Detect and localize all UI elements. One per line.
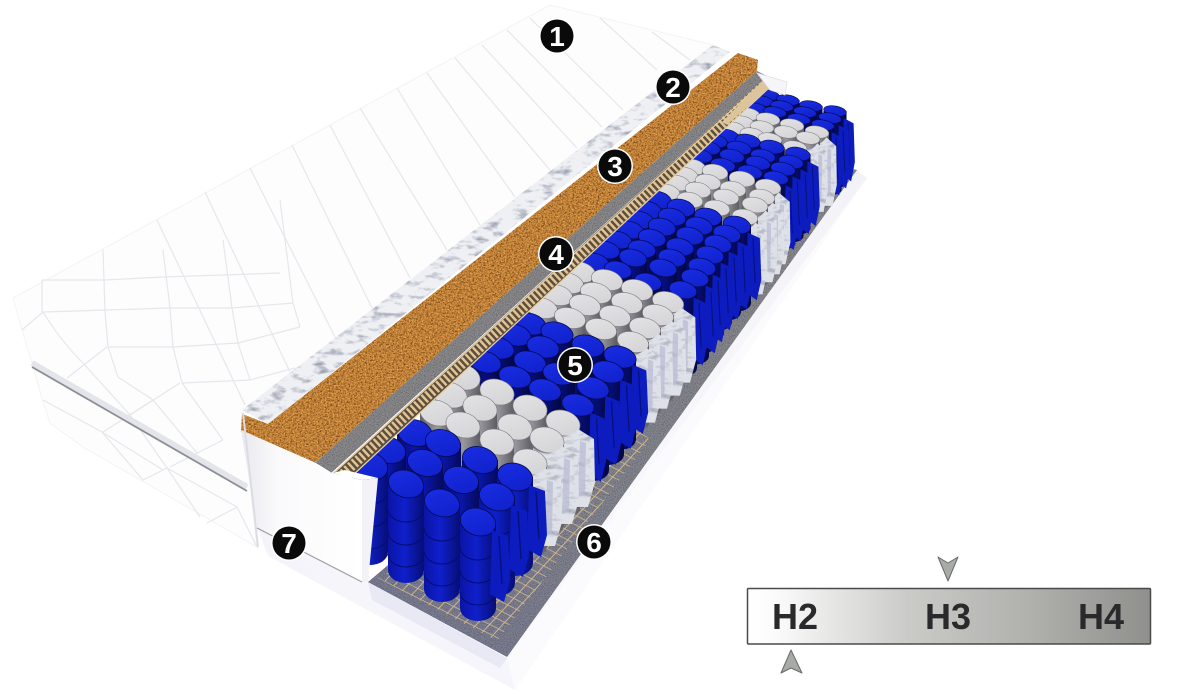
callout 2: 2 [665,72,681,103]
quilted mattress cover [13,5,713,547]
label H4: H4 [1078,596,1124,637]
callout 1: 1 [549,21,565,52]
callout 5: 5 [567,350,583,381]
zone: grey springs 4 [720,106,837,225]
callout 6 [576,524,612,560]
arrow marker at H3 [938,557,958,581]
pocket springs: H2/H3 comfort zones [349,88,855,621]
callout 4: 4 [548,239,564,270]
cover side seam [32,363,247,491]
scale bar [748,588,1150,644]
label H2: H2 [772,596,818,637]
zone: grey springs 2 [524,258,696,432]
zone: back blue springs [743,88,855,202]
wire mesh frame [332,76,771,476]
callout 6: 6 [586,527,602,558]
callout 4 [538,236,574,272]
callout markers [271,18,691,561]
zone: blue springs 5 [686,127,820,258]
back end white foam piece [757,73,787,95]
callout 1 [539,18,575,54]
bottom foam slab [257,170,867,690]
zone: blue springs 4 [579,188,761,376]
arrow marker at H2 [781,650,802,673]
zone: grey springs 3 [653,157,790,300]
zone: grey springs 1 [416,360,595,558]
zone: blue springs 3 [466,309,648,498]
label 7 side foam block [241,413,378,582]
callout 7: 7 [281,528,297,559]
callout 3: 3 [607,151,623,182]
label 6 felt layer on base [368,165,857,657]
callout 3 [597,148,633,184]
callout 5 [557,347,593,383]
callout 2 [655,69,691,105]
label 2 marble latex layer [242,45,730,424]
callout 7 [271,525,307,561]
zone: front blue springs [349,415,547,621]
label 3 coconut layer [241,53,758,463]
label H3: H3 [925,596,971,637]
label 4 grey felt layer [315,71,767,474]
firmness scale [748,557,1150,673]
